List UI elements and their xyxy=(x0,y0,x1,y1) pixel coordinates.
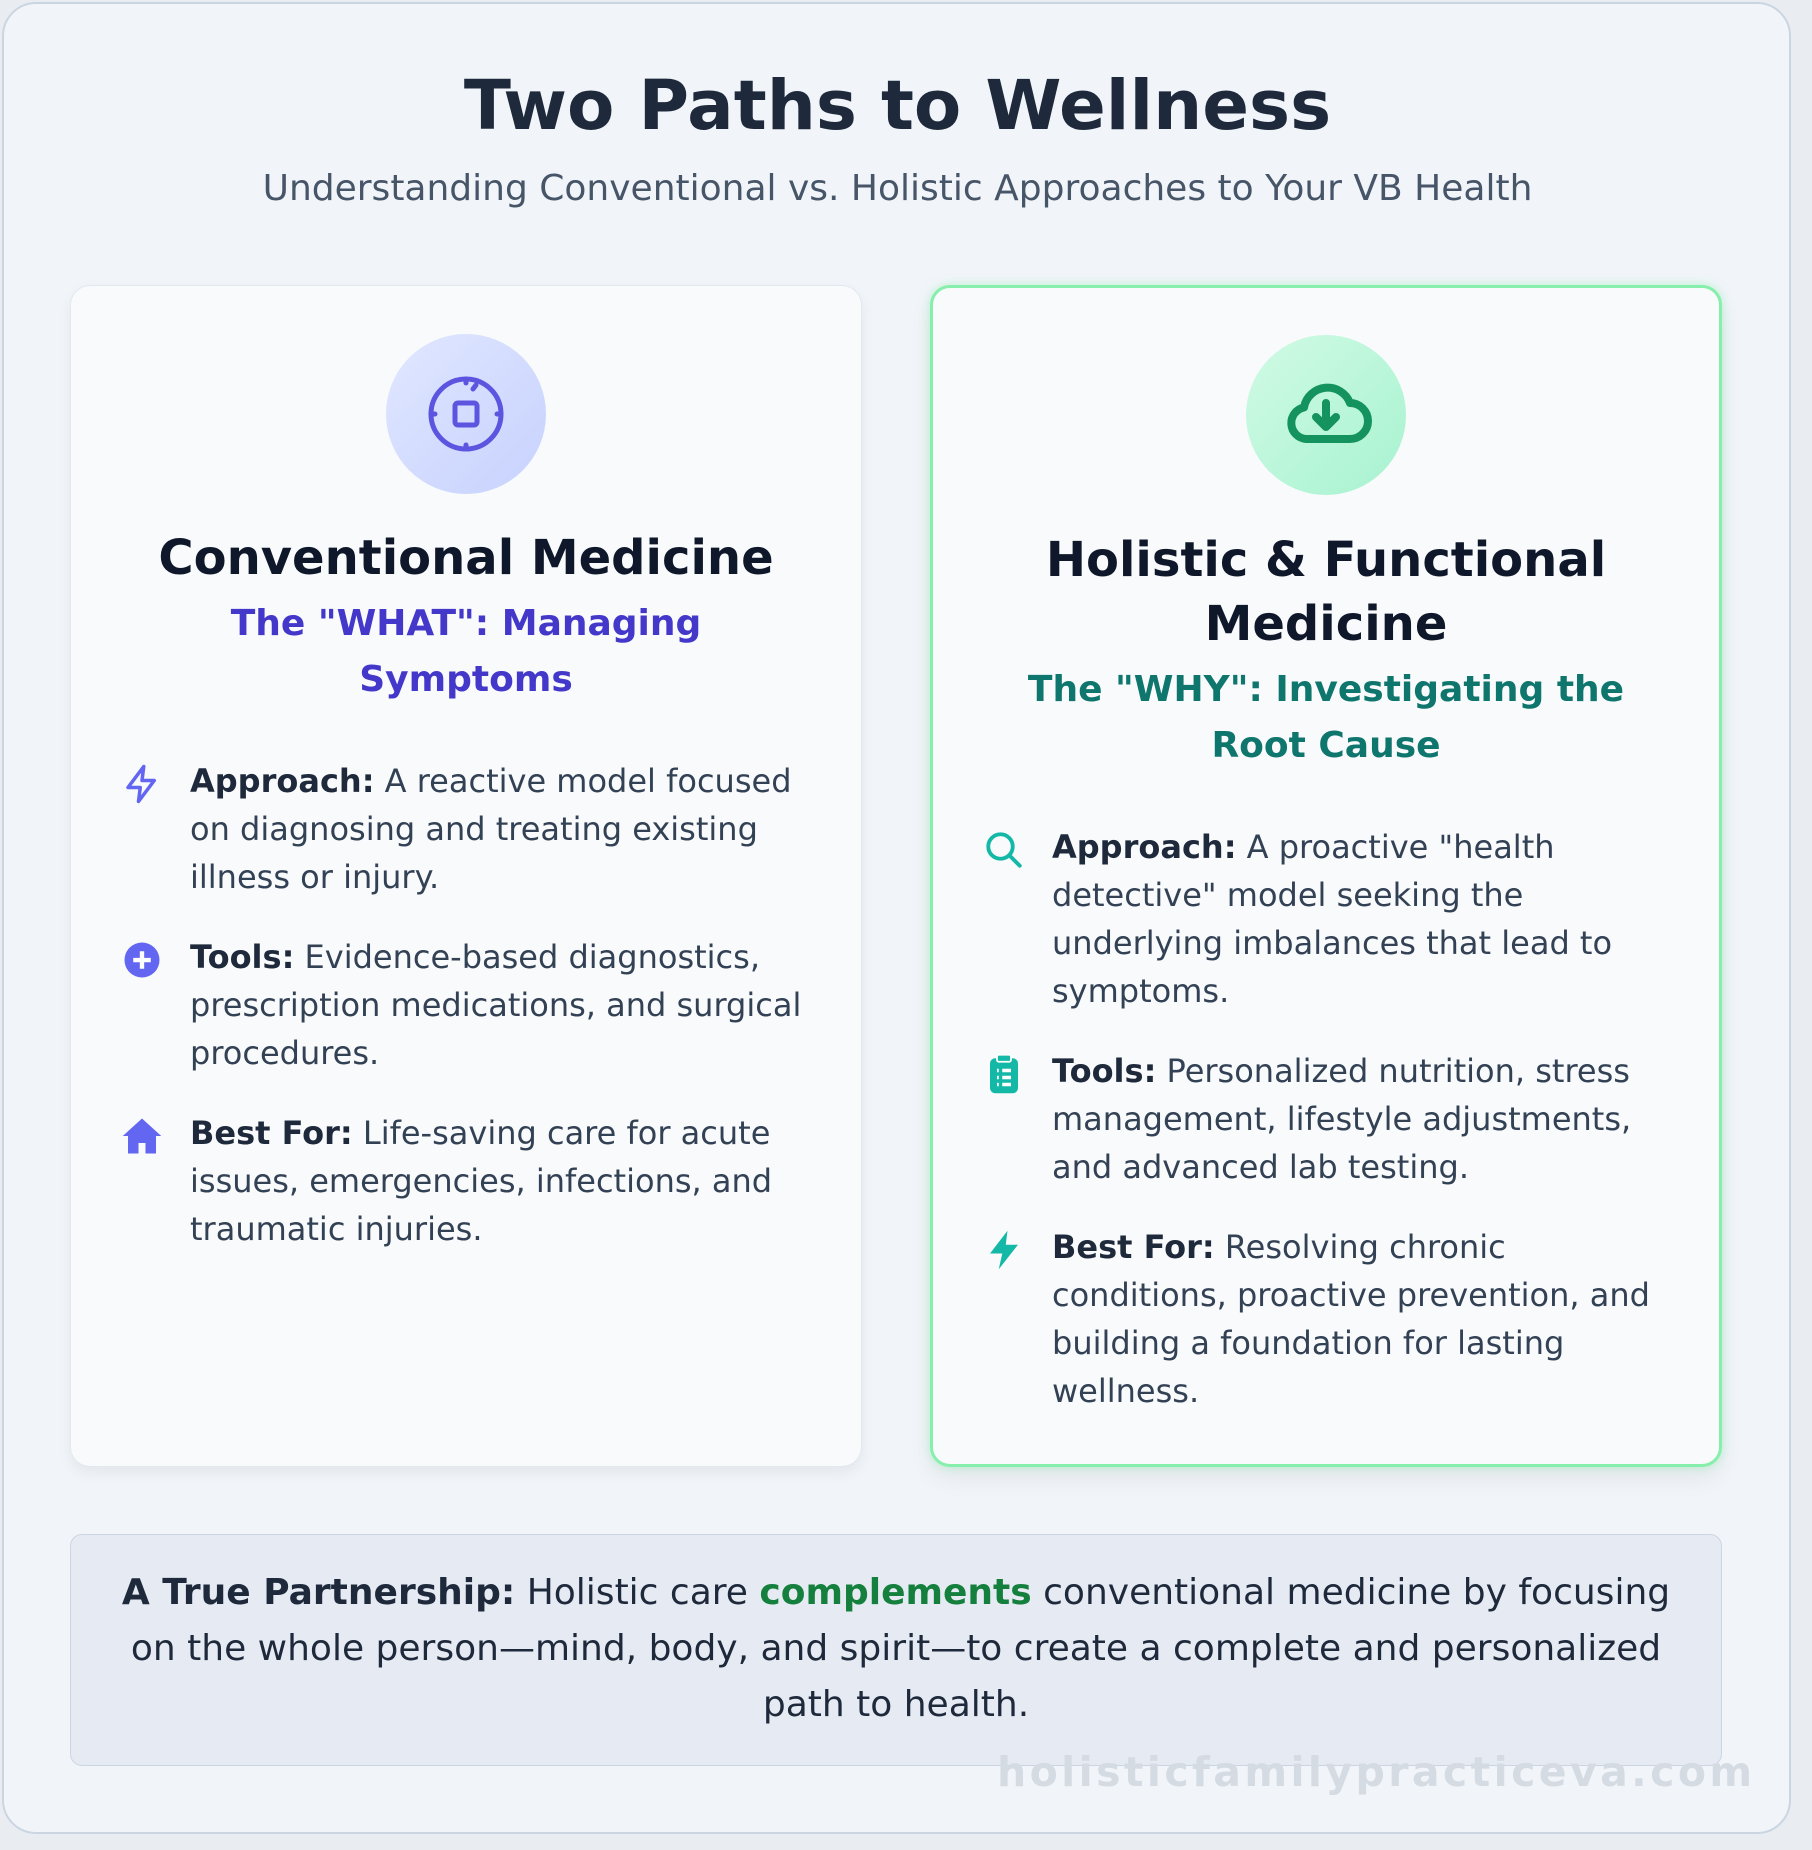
callout: partnership xyxy=(70,1534,1722,1766)
heading: Holistic & Functional xyxy=(1046,532,1606,588)
title: Two Paths to Wellness xyxy=(464,66,1331,146)
subheading: The "WHY": Investigating the Root Cause xyxy=(1028,669,1624,766)
icon: target xyxy=(386,334,546,494)
panel: conventional medicine xyxy=(70,285,862,1467)
item: best for: Best For: Life-saving care for acute issues, emergencies, infections, and traumatic injuries. xyxy=(190,1114,772,1248)
heading: Medicine xyxy=(1205,596,1447,652)
icon: cloud download xyxy=(1246,335,1406,495)
subtitle: Understanding Conventional vs. Holistic Approaches to Your VB Health xyxy=(263,168,1532,209)
heading xyxy=(1046,532,1606,652)
item: approach: Approach: A reactive model focused on diagnosing and treating existing illness or injury. xyxy=(190,762,792,896)
item: approach: Approach: A proactive "health detective" model seeking the underlying imbalances that lead to symptoms. xyxy=(1052,828,1612,1010)
panel: holistic medicine xyxy=(930,285,1722,1467)
watermark: holisticfamilypracticeva.com xyxy=(997,1748,1756,1796)
heading: Conventional Medicine xyxy=(158,530,774,586)
subheading: The "WHAT": Managing Symptoms xyxy=(231,603,701,700)
callout: partnership: A True Partnership: Holistic care complements conventional medicine by focusing on the whole person—mind, body, and spirit—to create a complete and personalized path to health. xyxy=(122,1572,1670,1725)
item: tools: Tools: Evidence-based diagnostics, prescription medications, and surgical procedures. xyxy=(190,938,801,1072)
item: best for: Best For: Resolving chronic conditions, proactive prevention, and building a foundation for lasting wellness. xyxy=(1052,1228,1650,1410)
item: tools: Tools: Personalized nutrition, stress management, lifestyle adjustments, and advanced lab testing. xyxy=(1052,1052,1631,1186)
